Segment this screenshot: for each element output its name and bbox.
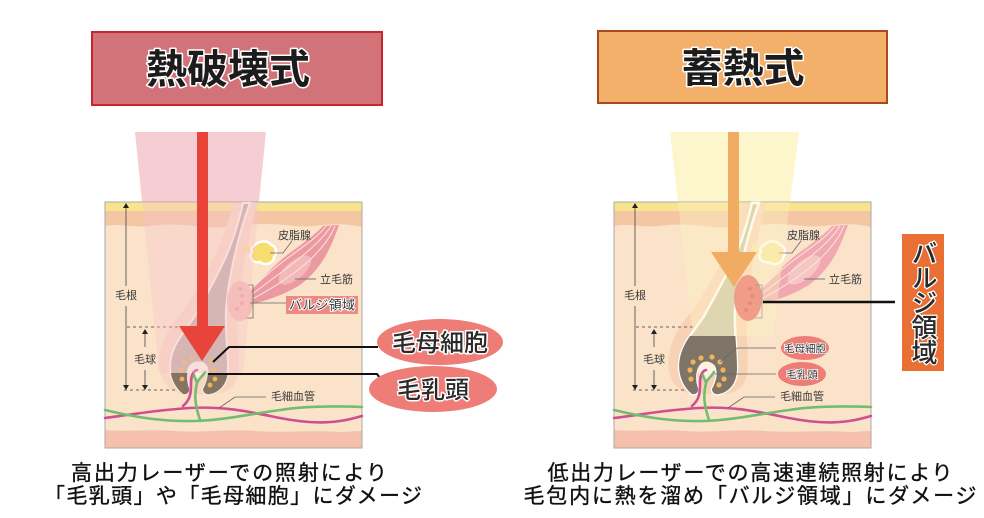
label: 立毛筋: 立毛筋 [829, 272, 862, 286]
label: 立毛筋 [804, 272, 862, 286]
hair bulb dark lower part [679, 336, 737, 394]
sebaceous gland [752, 241, 785, 264]
caption: 高出力レーザーでの照射により [71, 462, 387, 485]
label: 皮脂腺: 皮脂腺 [278, 228, 311, 242]
label: 皮脂腺 [779, 228, 820, 253]
heading: 蓄熱式: 蓄熱式 [682, 47, 804, 91]
hair shaft [170, 203, 250, 394]
dermal papilla [698, 362, 715, 378]
hair shaft [679, 203, 759, 394]
label: 毛球 with arrow [124, 327, 180, 390]
heading: 熱破壊式 [92, 32, 382, 105]
follicle sheath [668, 203, 766, 394]
callout: 毛母細胞: 毛母細胞 [784, 342, 826, 355]
capillaries [105, 370, 362, 422]
laser arrow [179, 132, 225, 361]
label: 毛細血管: 毛細血管 [780, 389, 824, 403]
hair bulb dark lower part [170, 373, 228, 394]
label: 皮脂腺 [270, 228, 311, 253]
caption [44, 462, 422, 508]
callout: 毛乳頭: 毛乳頭 [786, 369, 818, 381]
label: 立毛筋 [295, 272, 353, 286]
label: バルジ領域: バルジ領域 [289, 298, 355, 312]
caption: 毛包内に熱を溜め「バルジ領域」にダメージ [524, 485, 976, 508]
panel: thermal destruction method [44, 32, 503, 508]
heading: 蓄熱式 [598, 31, 887, 103]
arrector pili muscle [756, 225, 848, 305]
caption [524, 462, 976, 508]
caption: 低出力レーザーでの高速連続照射により [548, 462, 952, 485]
label: 毛球 with arrow: 毛球 [134, 353, 156, 366]
dermal papilla [189, 362, 206, 378]
skin diagram [614, 202, 871, 448]
callout: 毛母細胞 [720, 336, 829, 362]
skin diagram [105, 202, 362, 448]
arrector pili muscle [247, 225, 339, 305]
label: バルジ領域 [250, 296, 358, 314]
pointer line: 毛母細胞 [213, 347, 378, 362]
label: 毛根 with arrow [624, 203, 646, 390]
label: 毛根 with arrow [115, 203, 137, 390]
bulge region [227, 281, 253, 321]
callout: バルジ領域 vertical: バルジ領域 [908, 240, 938, 365]
heading: 熱破壊式: 熱破壊式 [146, 48, 310, 92]
callout: 毛乳頭 [369, 366, 497, 412]
pointer line: 毛乳頭 [208, 374, 380, 378]
callout: 毛乳頭: 毛乳頭 [397, 377, 469, 404]
label: 毛根 with arrow: 毛根 [115, 289, 137, 302]
label: 毛球 with arrow [633, 327, 696, 390]
callout: 毛母細胞 [377, 319, 503, 365]
label: 皮脂腺: 皮脂腺 [787, 228, 820, 242]
label: 毛細血管: 毛細血管 [271, 389, 315, 403]
label: 毛球 with arrow: 毛球 [643, 353, 665, 366]
laser beam top [670, 132, 799, 202]
label: 立毛筋: 立毛筋 [320, 272, 353, 286]
label: 毛根 with arrow: 毛根 [624, 289, 646, 302]
callout: 毛乳頭 [715, 362, 826, 386]
laser beam inside skin [678, 202, 790, 336]
heat arrow [711, 132, 757, 287]
pointer line: バルジ領域 [763, 301, 895, 303]
callout: バルジ領域 vertical [902, 234, 944, 371]
laser beam top [135, 132, 266, 202]
callout: 毛母細胞: 毛母細胞 [392, 330, 488, 357]
hair matrix cells [687, 354, 727, 388]
label: 毛細血管 [728, 389, 824, 408]
capillaries [614, 370, 871, 422]
caption: 「毛乳頭」や「毛母細胞」にダメージ [44, 485, 422, 508]
bulge region [734, 275, 762, 321]
label: 毛細血管 [219, 389, 315, 408]
sebaceous gland [243, 241, 276, 264]
follicle sheath [159, 203, 257, 394]
panel: heat storage method [524, 31, 976, 508]
hair matrix cells [179, 356, 217, 387]
laser beam inside skin [142, 202, 259, 373]
